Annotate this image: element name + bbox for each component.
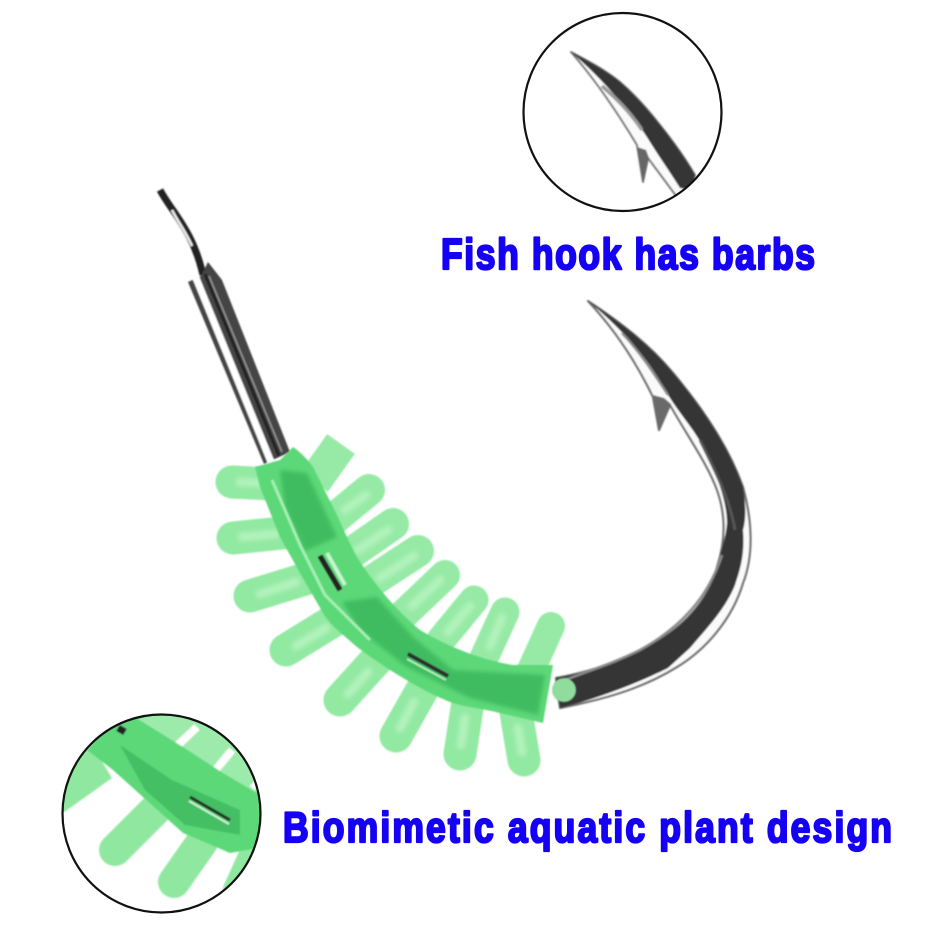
barb [653,395,671,430]
callout: barb detail circle [524,13,722,211]
wire slot lower [408,654,448,676]
hook silhouette [556,301,751,708]
end bead [552,678,576,702]
bristle highlights [240,482,522,752]
icon: fish hook shank and eye [160,190,290,464]
callout: bait detail circle [60,712,264,912]
lower bristles [232,482,524,760]
body dark segments [280,470,545,715]
wire slot upper [320,556,340,590]
title: barbs caption: Fish hook has barbs [441,231,815,279]
body light seam [272,480,370,640]
upper bristles [314,444,551,670]
panel: green biomimetic aquatic plant bait [232,444,576,760]
hook dark body [556,301,745,708]
body tube [255,447,553,723]
title: aquatic plant caption: Biomimetic aquatic plant design [283,805,892,852]
icon: fish hook bend and barbed point [556,301,751,708]
